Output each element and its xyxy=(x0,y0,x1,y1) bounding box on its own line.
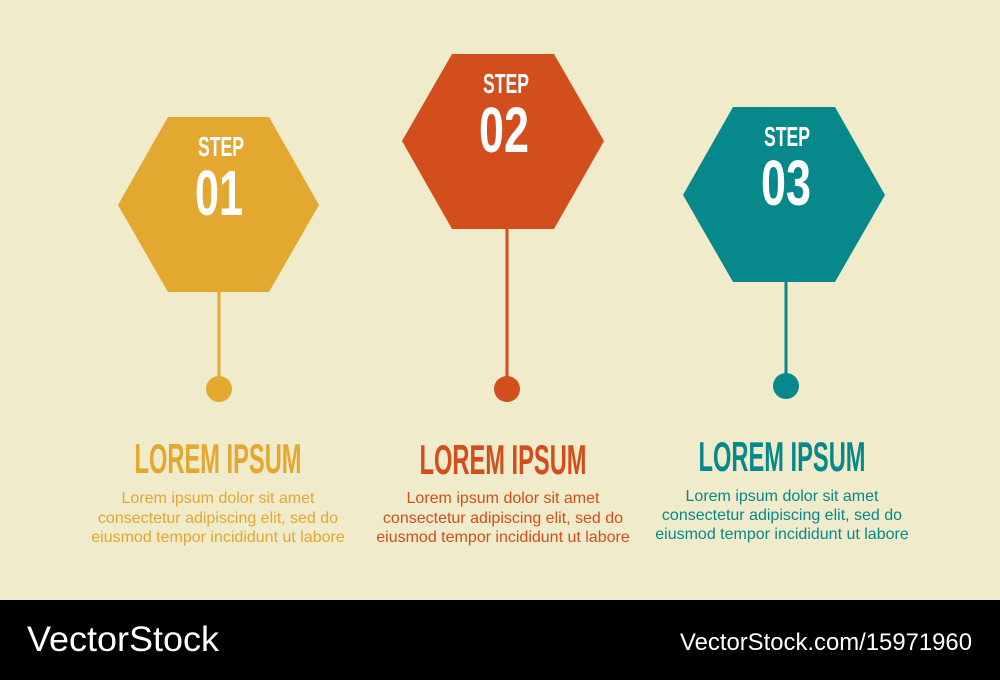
step label 3: STEP xyxy=(764,121,810,152)
dot 2 xyxy=(494,376,520,402)
number 02: 02 xyxy=(479,94,529,166)
hexagon 3 xyxy=(683,107,885,282)
body 2: eiusmod tempor incididunt ut labore xyxy=(376,529,630,546)
footer bar xyxy=(0,600,1000,680)
step 2 xyxy=(376,54,630,546)
body 3: Lorem ipsum dolor sit amet xyxy=(686,488,879,505)
hexagon 2 xyxy=(402,54,604,229)
title 2: LOREM IPSUM xyxy=(420,436,586,483)
body 3: eiusmod tempor incididunt ut labore xyxy=(655,526,909,543)
body 2: consectetur adipiscing elit, sed do xyxy=(383,510,623,527)
dot 1 xyxy=(206,376,232,402)
hexagon 1 xyxy=(118,117,319,292)
footer url: VectorStock.com/15971960 xyxy=(680,629,972,656)
title 1: LOREM IPSUM xyxy=(134,435,302,482)
stem 2 xyxy=(506,229,508,382)
number 01: 01 xyxy=(195,157,243,229)
step 1 xyxy=(91,117,345,546)
dot 3 xyxy=(773,373,799,399)
footer logo: VectorStock xyxy=(27,620,220,659)
step label 1: STEP xyxy=(198,131,244,162)
body 1: Lorem ipsum dolor sit amet xyxy=(122,490,315,507)
body 3: consectetur adipiscing elit, sed do xyxy=(662,507,902,524)
body 1: eiusmod tempor incididunt ut labore xyxy=(91,529,345,546)
stem 1 xyxy=(218,292,220,382)
body 1: consectetur adipiscing elit, sed do xyxy=(98,510,338,527)
body 2: Lorem ipsum dolor sit amet xyxy=(407,490,600,507)
title 3: LOREM IPSUM xyxy=(698,433,866,480)
step label 2: STEP xyxy=(483,68,529,99)
number 03: 03 xyxy=(761,147,811,219)
stem 3 xyxy=(784,282,788,379)
step 3 xyxy=(655,107,909,543)
